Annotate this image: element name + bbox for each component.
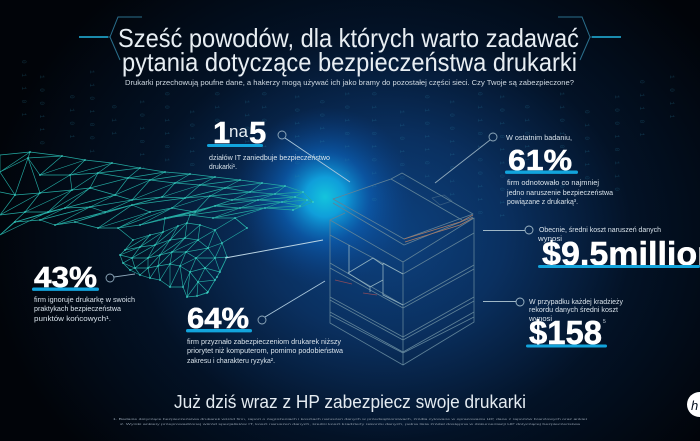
tray reflection	[335, 280, 377, 295]
binary rain pattern: 1 0 1 0 1 1	[138, 100, 145, 173]
underline	[186, 329, 252, 332]
binary rain pattern: 1 1 0 1 0 0 1 0	[558, 92, 565, 191]
title frame	[79, 17, 621, 60]
connector	[258, 281, 325, 324]
subtitle: Drukarki przechowują poufne dane, a hakerzy mogą używać ich jako bramy do pozostałej części sieci. Czy Twoje są zabezpieczone?	[125, 78, 574, 87]
footnotes: 1. Badanie dotyczące bezpieczeństwa drukarek wśród firm, raport o zagrożeniach i kosztach naruszeń danych w przedsiębiorstwach, źródła cytowane w opracowaniu HP, dane z raportów branżowych oraz ankiet	[113, 417, 588, 421]
description: W przypadku każdej kradzieży	[529, 299, 623, 306]
binary rain pattern: 0 1 0 1 1	[523, 105, 530, 164]
stat: $158: wynosi	[528, 316, 552, 323]
blue glow at the fingertip	[235, 107, 415, 287]
lid hinge band	[404, 215, 473, 242]
underline	[32, 288, 99, 291]
stat: $9.5 million: wynosi	[537, 236, 562, 243]
underline	[526, 344, 607, 348]
hand mesh illustration	[0, 152, 313, 297]
stat: 64%: priorytet niż komputerom, pomimo podobieństwa	[187, 348, 343, 355]
intro: W ostatnim badaniu,	[506, 135, 572, 142]
footnotes: 2. Wyniki ankiety przeprowadzonej wśród specjalistów IT, koszt naruszeń danych, średni koszt kradzieży rekordu danych, pełna lista źródeł dostępna w dokumentacji HP dotyczącej bezpieczeństwa	[120, 422, 581, 426]
stat: 61%: powiązane z drukarką³.	[507, 199, 578, 206]
connector: hand to printer	[225, 240, 323, 258]
binary rain pattern: 0 1 0 1 1 0 1	[583, 110, 590, 196]
lid edge	[333, 179, 473, 245]
value: 61%	[508, 145, 572, 177]
stat: $9.5 million	[483, 226, 700, 272]
binary rain pattern: 1 0 1 1 0	[188, 110, 195, 169]
connector	[483, 226, 533, 234]
control panel	[432, 195, 452, 205]
binary rain pattern: 0 1 0	[213, 92, 220, 125]
binary rain pattern: 1 0 1 1	[668, 75, 675, 121]
binary rain pattern: 1 0 0 1 0 1 1 0	[613, 95, 620, 194]
stat: 1 na 5	[207, 115, 350, 182]
title: pytania dotyczące bezpieczeństwa drukarki	[122, 47, 577, 77]
title: Sześć powodów, dla których warto zadawać	[118, 23, 579, 53]
binary rain pattern: 0 1 1 0 1	[638, 80, 645, 139]
printer body bands	[330, 233, 474, 353]
call to action: Już dziś wraz z HP zabezpiecz swoje drukarki	[174, 392, 526, 412]
description: Obecnie, średni koszt naruszeń danych	[539, 227, 661, 234]
value five: 5	[249, 115, 266, 150]
footnotes	[113, 417, 588, 426]
binary rain pattern: 0 1 0 0 1 1	[260, 92, 267, 165]
left bracket	[108, 17, 142, 60]
stat: 43%: punktów końcowych¹.	[34, 316, 111, 323]
stat: 43%: praktykach bezpieczeństwa	[34, 306, 121, 313]
stat: $158	[483, 298, 623, 351]
binary rain pattern: 1 0 1 0 1 1 0	[343, 92, 350, 178]
right bracket	[558, 17, 592, 60]
stat: $158: rekordu danych średni koszt	[529, 307, 618, 314]
binary rain pattern: 0 1 0 1	[68, 95, 75, 141]
mesh lines	[0, 152, 313, 297]
stat: 64%	[186, 281, 343, 365]
binary rain pattern: 1 0 0 1 1 0	[38, 75, 45, 148]
logo disc	[687, 392, 700, 417]
binary rain pattern: 1 1 0 1 0 0	[398, 110, 405, 183]
binary rain pattern: 0 0 1 1 0 1 0	[163, 92, 170, 178]
underline	[538, 265, 700, 268]
connector	[435, 133, 497, 183]
footnote mark: 5	[603, 319, 606, 325]
stat: 1 na 5: drukarki¹.	[209, 164, 237, 171]
connector	[106, 274, 135, 282]
description: firm przyznało zabezpieczeniom drukarek niższy	[187, 339, 342, 346]
binary rain pattern: 0 0 1 1 0 1	[318, 100, 325, 173]
binary rain pattern: 1 1 0 1	[243, 100, 250, 146]
underline	[207, 144, 263, 147]
binary rain pattern: 0 1 0 1 1 0 1	[423, 95, 430, 181]
title	[118, 23, 579, 77]
output tray	[348, 245, 403, 305]
logo letters: h	[691, 398, 698, 413]
stat: 61%	[435, 133, 613, 206]
connector	[483, 298, 524, 306]
right accent line	[592, 36, 621, 38]
value: 64%	[187, 303, 249, 335]
printer lid	[333, 173, 473, 239]
binary rain pattern	[20, 60, 675, 220]
binary rain pattern: 0 1 1 0 1 0 1 1 0	[370, 92, 377, 204]
binary rain pattern: 0 1 1	[110, 105, 117, 138]
mesh nodes	[15, 152, 313, 297]
description: działów IT zaniedbuje bezpieczeństwo	[209, 155, 330, 162]
value: 43%	[34, 262, 97, 294]
stat: 64%: zakresu i charakteru ryzyka².	[187, 358, 275, 365]
value word: na	[229, 122, 248, 141]
binary rain pattern: 0 1 1 0 1 0 0 1 1 0	[476, 92, 483, 217]
underline	[505, 170, 578, 174]
stat: 43%	[32, 262, 135, 323]
description: firm odnotowało co najmniej	[507, 180, 599, 187]
binary rain pattern: 1 1 0 1 0 0 1	[88, 70, 95, 156]
binary rain pattern: 1 0 1 0 1 1 0 0 1 1	[498, 95, 505, 220]
binary rain pattern: 1 0 1 1 0 0 1 0 1	[293, 95, 300, 207]
value: 1	[213, 115, 230, 150]
left accent line	[79, 36, 108, 38]
stat: 61%: jedno naruszenie bezpieczeństwa	[506, 190, 613, 197]
description: firm ignoruje drukarkę w swoich	[34, 297, 135, 304]
connector	[278, 131, 350, 182]
binary rain pattern: 0 1 1 0 1	[20, 60, 27, 119]
printer illustration	[330, 173, 474, 365]
printer body outline	[330, 213, 474, 365]
HP logo	[687, 392, 700, 417]
binary rain pattern: 1 0 0 1 1 0 1 1	[448, 100, 455, 199]
value: $158	[529, 314, 602, 351]
